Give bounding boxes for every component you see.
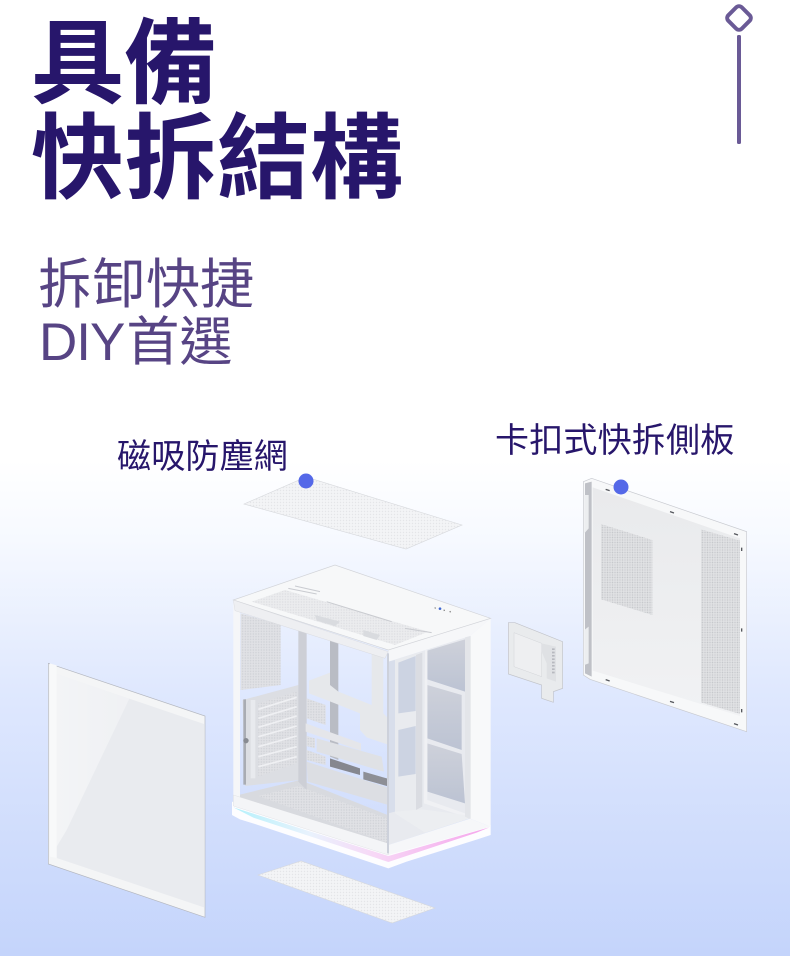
label: snap-on quick release side panel: 卡扣式快拆側板 xyxy=(495,422,734,460)
top face xyxy=(233,565,491,658)
front vertical glass edge xyxy=(387,653,389,853)
decorative marker: diamond and line xyxy=(726,5,752,144)
top dust filter xyxy=(244,477,462,549)
expansion cover xyxy=(317,738,384,772)
PCI slots bracket xyxy=(243,685,300,786)
front top rail xyxy=(233,600,388,658)
snap-on side panel xyxy=(583,478,747,732)
case back and floor xyxy=(238,780,425,845)
subtitle xyxy=(38,255,254,372)
PC case xyxy=(232,565,491,868)
left pillar and bottom rail xyxy=(233,600,240,803)
bottom dust filter xyxy=(258,861,435,923)
GPU bracket xyxy=(508,623,563,702)
rear gray column xyxy=(330,640,338,760)
upper plate xyxy=(309,653,389,745)
label: magnetic dust filter: 磁吸防塵網 xyxy=(117,438,288,476)
title: 快拆結構 xyxy=(31,107,403,211)
center column xyxy=(298,630,307,790)
RGB base strip xyxy=(232,802,491,868)
motherboard tray xyxy=(298,630,390,805)
right front pillar xyxy=(470,618,491,827)
right side glass interior xyxy=(388,636,470,845)
bottom rim of right side xyxy=(388,819,491,855)
tray mesh xyxy=(307,698,326,725)
callout dot: side panel xyxy=(614,480,628,494)
subtitle: DIY首選 xyxy=(39,313,232,372)
tempered glass panel xyxy=(48,663,205,917)
right top rail xyxy=(388,618,491,662)
subtitle: 拆卸快捷 xyxy=(38,255,254,315)
title xyxy=(31,12,403,211)
callout dot: dust filter xyxy=(298,474,314,488)
title: 具備 xyxy=(31,12,217,116)
tray bar xyxy=(306,723,361,751)
back wall mesh xyxy=(241,613,281,690)
lower block xyxy=(307,762,390,805)
